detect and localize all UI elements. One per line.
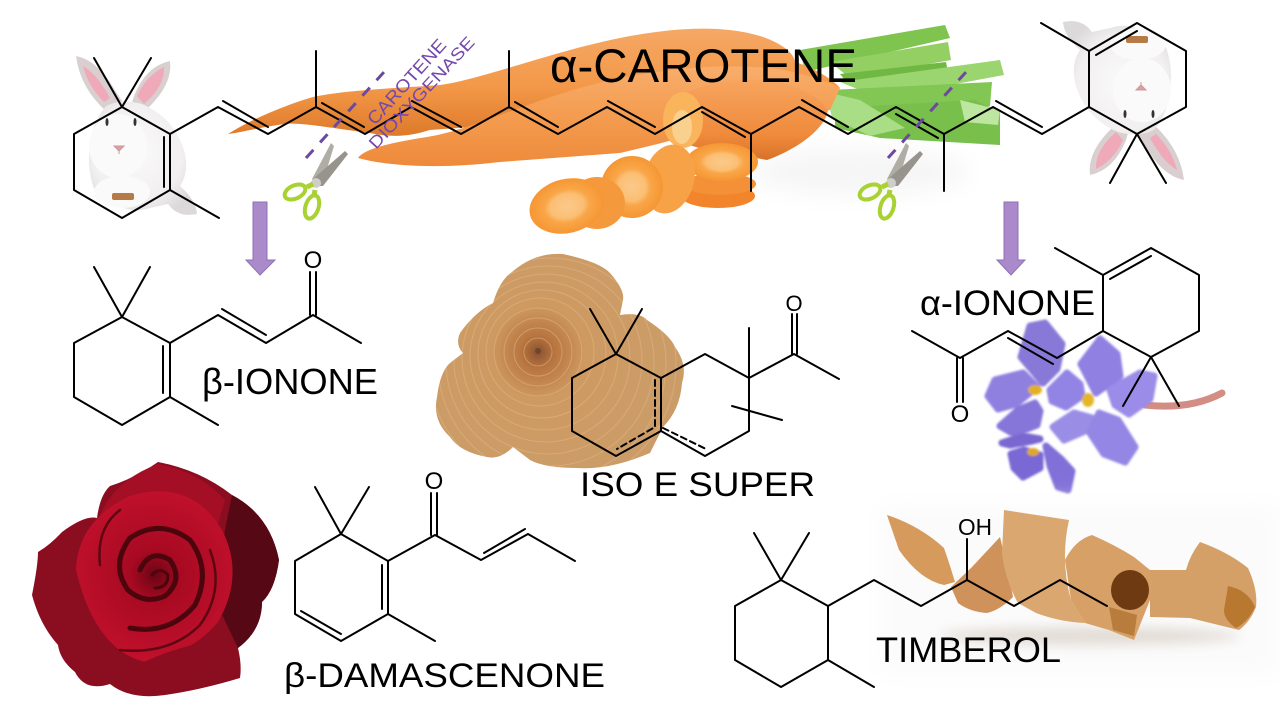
right ring of carotene bbox=[1041, 23, 1186, 183]
label: timberol: TIMBEROL bbox=[876, 631, 1061, 670]
illustration: rabbit, left bbox=[76, 56, 197, 215]
rose outer petals bbox=[32, 462, 279, 696]
icon: scissors, left bbox=[282, 143, 348, 220]
cleavage line, left bbox=[306, 72, 384, 158]
shavings shadow bbox=[940, 627, 1240, 645]
last curl bbox=[1150, 542, 1256, 630]
molecule: timberol bbox=[735, 533, 1107, 687]
illustration: wood shavings bbox=[880, 505, 1280, 675]
arrow: to alpha-ionone bbox=[997, 202, 1025, 275]
illustration: African violet flowers bbox=[988, 323, 1222, 490]
molecule: beta-damascenone bbox=[295, 487, 575, 641]
label: carotene dioxygenase: CAROTENE bbox=[363, 35, 450, 129]
label: alpha-ionone oxygen: O bbox=[951, 401, 969, 428]
violet stem bbox=[1145, 393, 1222, 406]
illustration: wood cross-section bbox=[436, 254, 684, 468]
cut carrot bbox=[664, 79, 828, 160]
illustration: rabbit, upside down, right bbox=[1063, 21, 1184, 180]
upper carrot bbox=[228, 29, 840, 136]
label: carotene dioxygenase: DIOXYGENASE bbox=[365, 33, 478, 153]
illustration: carrots with green tops bbox=[228, 25, 1004, 241]
left flower bbox=[988, 323, 1062, 434]
rose inner petals bbox=[76, 491, 233, 662]
carrot table shadow bbox=[750, 150, 970, 194]
cleavage line, right bbox=[888, 72, 966, 158]
label: beta-ionone: β-IONONE bbox=[202, 361, 378, 402]
molecule: beta-ionone bbox=[74, 267, 361, 425]
title: α-CAROTENE bbox=[550, 39, 857, 92]
arrow: to beta-ionone bbox=[246, 202, 275, 275]
centre flower bbox=[1050, 339, 1154, 462]
left ring of carotene bbox=[74, 58, 219, 218]
label: beta-damascenone oxygen: O bbox=[425, 468, 443, 495]
middle ribbon bbox=[1002, 510, 1085, 623]
bottom flower bbox=[1002, 436, 1072, 490]
molecule: iso e super bbox=[572, 309, 839, 456]
carrot slices bbox=[524, 139, 758, 241]
molecule: alpha-carotene bbox=[74, 23, 1186, 218]
shavings backdrop bbox=[880, 505, 1280, 675]
label: iso e super oxygen: O bbox=[785, 291, 803, 316]
label: timberol hydroxyl: OH bbox=[958, 514, 992, 540]
rose spiral bbox=[119, 528, 202, 629]
label: alpha-ionone: α-IONONE bbox=[920, 284, 1095, 323]
carrot greens bbox=[800, 25, 1004, 145]
illustration: red rose bbox=[32, 462, 279, 696]
main roll bbox=[1065, 535, 1152, 640]
second ribbon bbox=[951, 537, 1013, 613]
label: iso e super: ISO E SUPER bbox=[580, 466, 815, 504]
chain double bonds bbox=[223, 100, 1042, 138]
polyene chain bbox=[170, 107, 1089, 134]
label: beta-damascenone: β-DAMASCENONE bbox=[284, 657, 605, 695]
molecule: alpha-ionone bbox=[912, 248, 1199, 406]
icon: scissors, right bbox=[857, 143, 923, 220]
first ribbon bbox=[887, 515, 955, 585]
label: beta-ionone oxygen: O bbox=[304, 247, 322, 274]
chain methyl groups bbox=[316, 51, 944, 191]
middle carrot bbox=[358, 66, 840, 166]
